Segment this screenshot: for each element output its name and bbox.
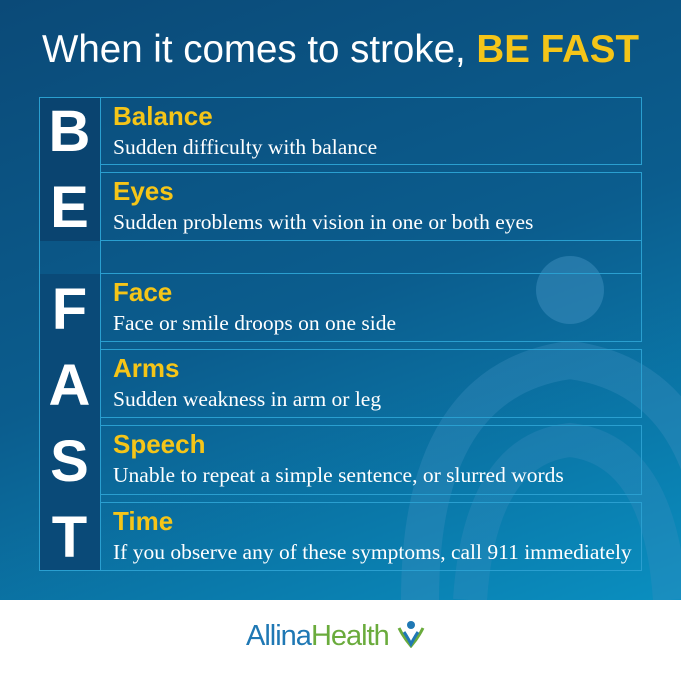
row: eyes: Eyes [113, 176, 174, 206]
row: balance: Balance [113, 101, 213, 131]
row: eyes: Sudden problems with vision in one or both eyes [113, 210, 533, 234]
row: arms: Arms [113, 353, 179, 383]
text: E [50, 175, 89, 240]
row: time [100, 502, 642, 571]
row: face: Face [113, 277, 172, 307]
letters: B [49, 99, 90, 164]
footer logo: AllinaHealth [246, 620, 389, 652]
row: time: Time [113, 506, 173, 536]
text: A [49, 353, 90, 418]
row: speech: Speech [113, 429, 206, 459]
row: balance [100, 97, 642, 165]
row: balance: Sudden difficulty with balance [113, 135, 377, 159]
row: time: If you observe any of these symptoms, call 911 immediately [113, 540, 632, 564]
title: When it comes to stroke, BE FAST [42, 28, 639, 71]
row: arms [100, 349, 642, 418]
row: face [100, 273, 642, 342]
spacer row [100, 240, 642, 274]
letter column [39, 97, 101, 571]
icon: logo mark [398, 621, 424, 648]
row: speech: Unable to repeat a simple sentence, or slurred words [113, 463, 564, 487]
row: arms: Sudden weakness in arm or leg [113, 387, 381, 411]
row: face: Face or smile droops on one side [113, 311, 396, 335]
text: T [52, 505, 87, 570]
text: S [50, 429, 89, 494]
text: F [52, 277, 87, 342]
row: speech [100, 425, 642, 495]
row: eyes [100, 172, 642, 241]
